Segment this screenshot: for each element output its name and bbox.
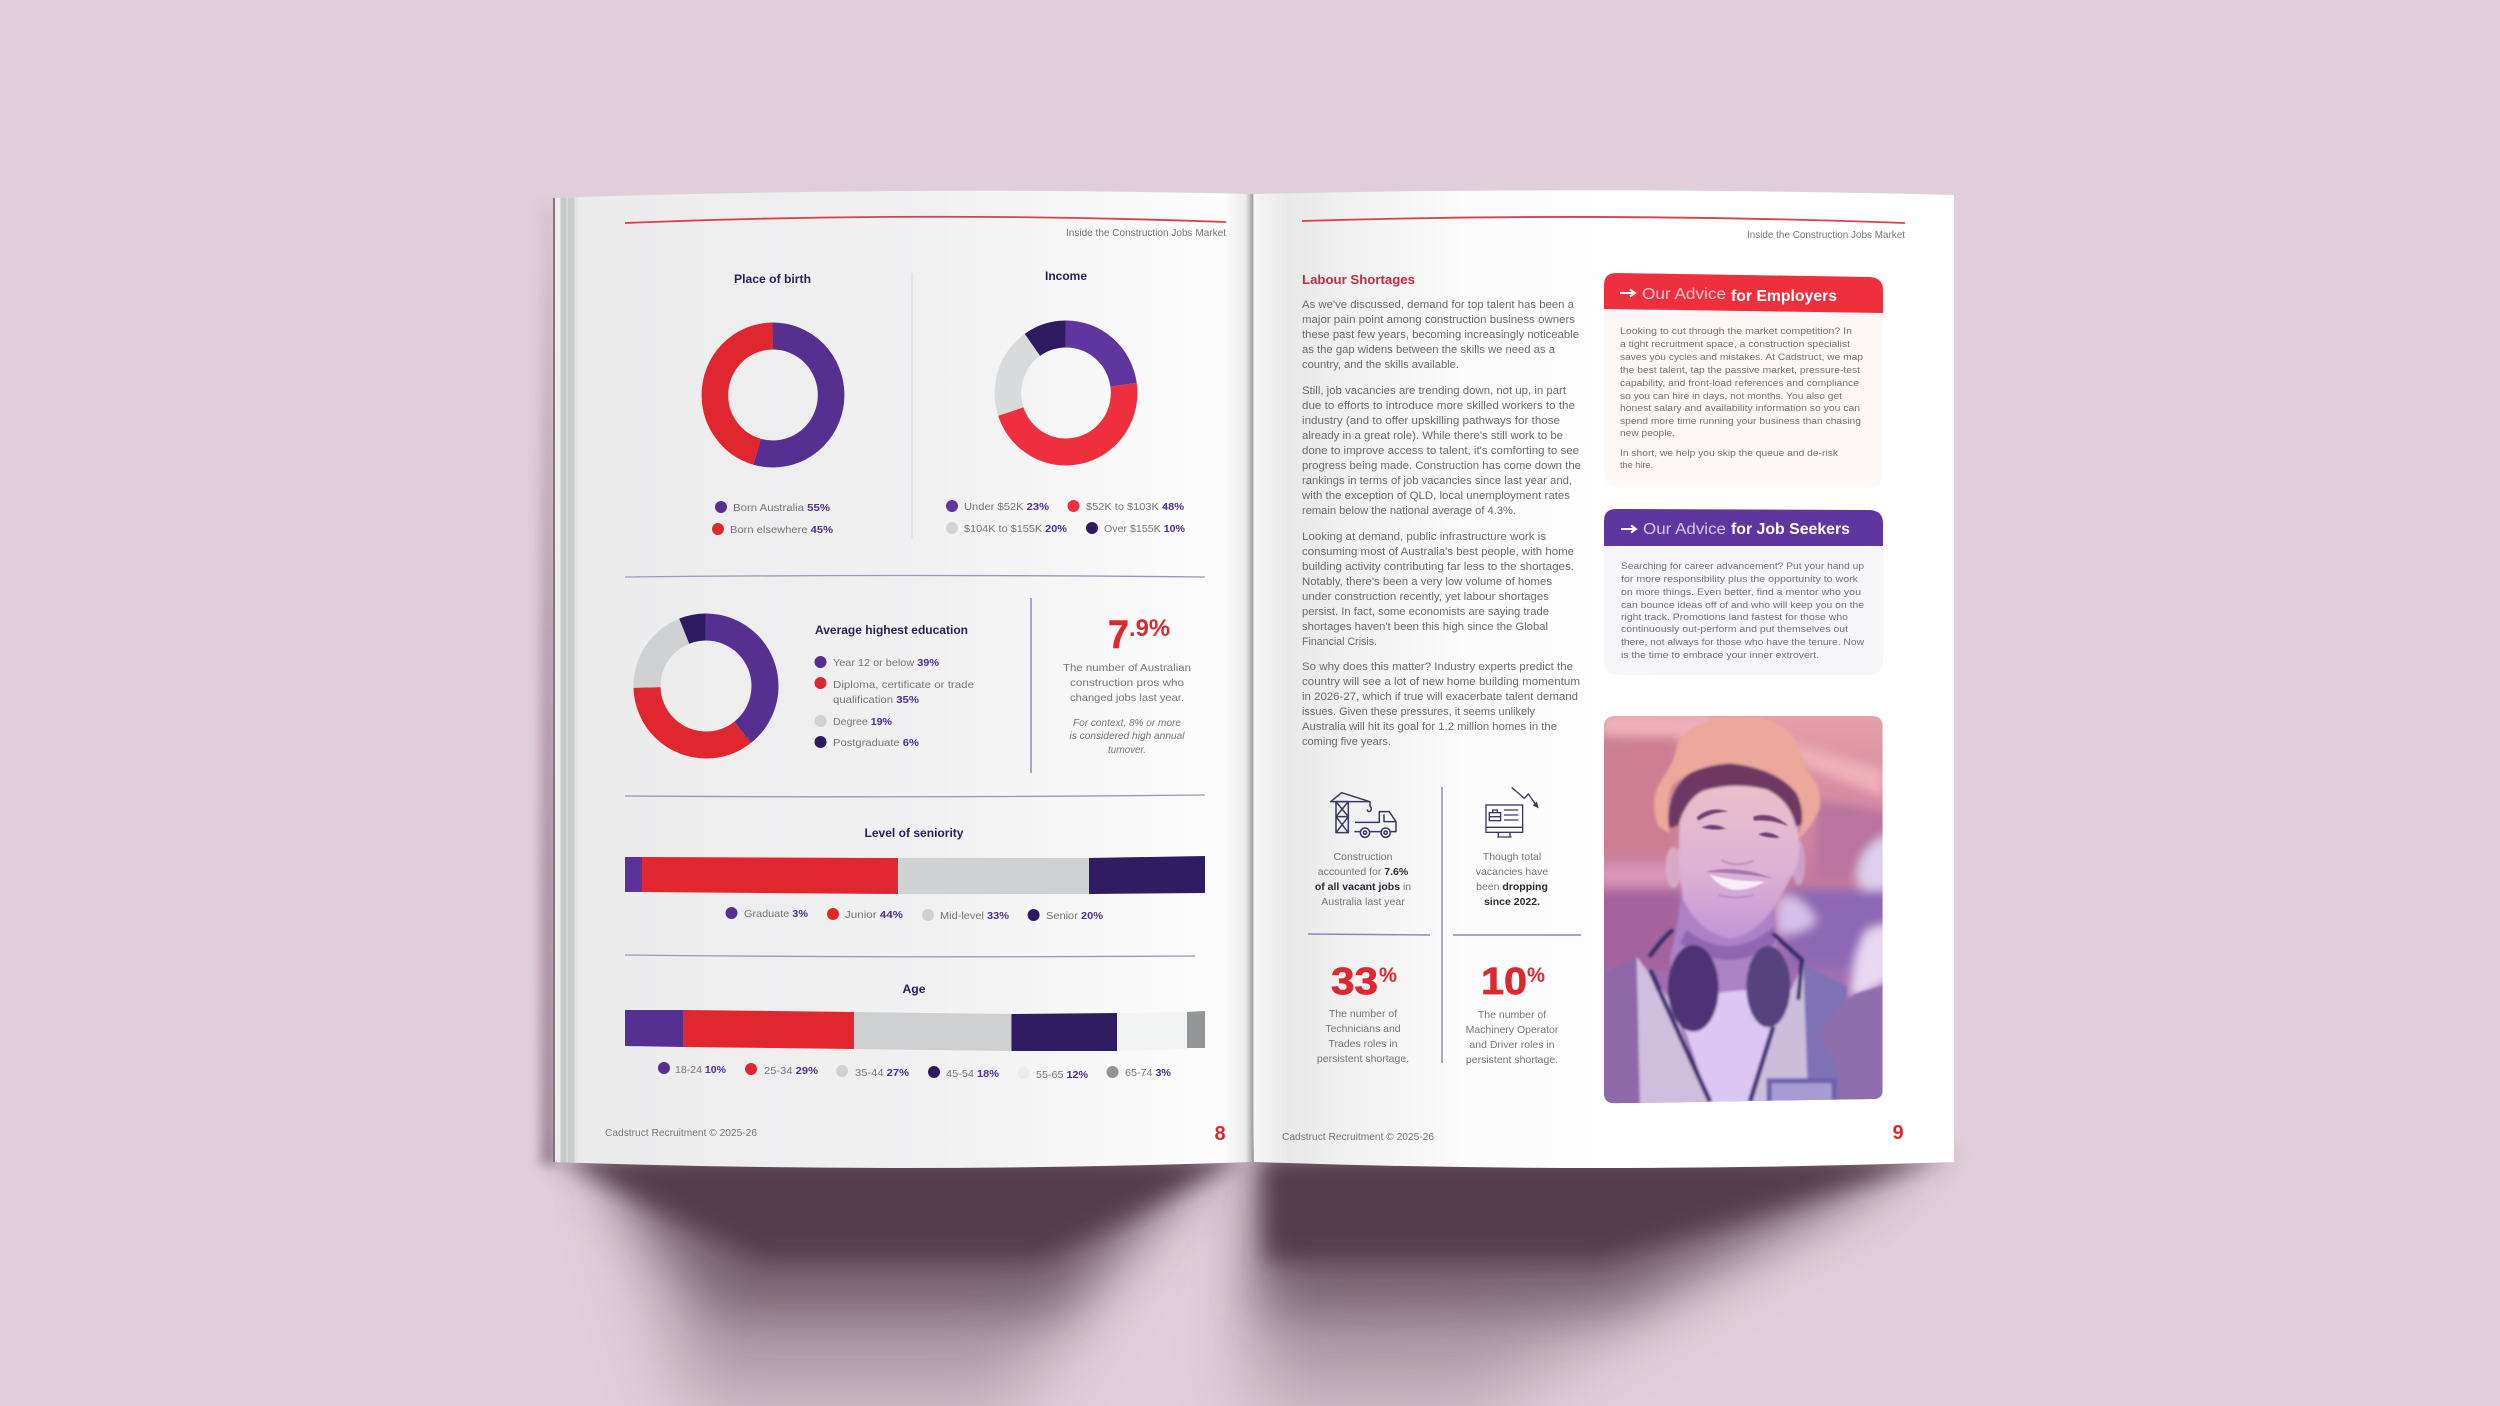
legend: Postgraduate 6% [833, 737, 920, 749]
paragraph 1: as the gap widens between the skills we need as a [1302, 344, 1556, 356]
heading: Level of seniority [864, 826, 964, 840]
panel: advice for job seekers [1604, 509, 1883, 675]
legend: Mid-level 33% [940, 910, 1010, 922]
paragraph 2: done to improve access to talent, it's comforting to see [1302, 445, 1579, 457]
body text [1620, 326, 1863, 471]
paragraph 2: already in a great role). While there's still work to be [1302, 430, 1563, 442]
legend [946, 500, 1186, 535]
heading: Average highest education [815, 623, 968, 637]
body text: for more responsibility plus the opportunity to work [1621, 574, 1858, 585]
body text: continuously out-perform and put themselves out [1621, 624, 1848, 635]
header title [1621, 521, 1850, 538]
paragraph 2: due to efforts to introduce more skilled workers to the [1302, 400, 1575, 412]
stat text: vacant jobs: of all vacant jobs in [1315, 881, 1411, 893]
legend: 25-34 29% [764, 1065, 819, 1077]
text block: labour shortages [1301, 272, 1581, 748]
description: construction pros who [1070, 677, 1184, 689]
legend: Year 12 or below 39% [833, 657, 940, 669]
panel: advice for employers [1604, 273, 1883, 487]
paragraph 3: Notably, there's been a very low volume of homes [1302, 576, 1553, 588]
stat text: dropping vacancies [1476, 851, 1548, 908]
body text: a tight recruitment space, a construction specialist [1620, 339, 1850, 350]
description: and Driver roles in [1469, 1039, 1555, 1051]
icon: monitor with falling arrow [1486, 787, 1539, 837]
paragraph 2: with the exception of QLD, local unemployment rates [1301, 490, 1571, 502]
legend: Degree 19% [833, 716, 893, 728]
chart: level of seniority [625, 826, 1205, 922]
footer left: Cadstruct Recruitment © 2025-26 [605, 1127, 757, 1139]
heading: Labour Shortages [1302, 272, 1415, 287]
legend: 65-74 3% [1125, 1067, 1172, 1079]
paragraph 3: under construction recently, yet labour shortages [1302, 591, 1550, 603]
heading: Age [902, 982, 926, 996]
description: Machinery Operator [1466, 1024, 1559, 1036]
body text: Looking to cut through the market competition? In [1620, 326, 1852, 337]
paragraph 2: Still, job vacancies are trending down, not up, in part [1302, 385, 1566, 397]
paragraph 2: rankings in terms of job vacancies since last year and, [1302, 475, 1572, 487]
description: changed jobs last year. [1070, 692, 1184, 704]
stat: % [1379, 964, 1397, 987]
paragraph 3: Financial Crisis. [1302, 636, 1377, 648]
infographic: open brochure mockup [534, 190, 1954, 1406]
stacked bar [625, 856, 1205, 894]
legend: Graduate 3% [744, 908, 809, 920]
body text: In short, we help you skip the queue and de-risk [1620, 448, 1838, 459]
stat: 33 [1331, 961, 1378, 1003]
body text: so you can hire in days, not months. You also get [1620, 391, 1842, 402]
description [1063, 662, 1191, 704]
description [1317, 1008, 1409, 1065]
paragraph 3: persist. In fact, some economists are saying trade [1302, 606, 1549, 618]
note: turnover. [1108, 744, 1146, 756]
stat: % [1527, 964, 1545, 987]
top rule [625, 217, 1226, 223]
page stack spine [553, 190, 578, 1175]
stat text: dropping vacancies: been dropping [1476, 881, 1548, 893]
paragraph 4 [1302, 661, 1580, 748]
stat text: vacant jobs [1315, 851, 1411, 908]
page sheet left [553, 191, 1253, 1168]
card body [1604, 309, 1883, 487]
donut [715, 336, 831, 454]
stat text: dropping vacancies: since 2022. [1484, 896, 1540, 908]
legend: Senior 20% [1046, 910, 1104, 922]
chart: age [625, 982, 1205, 1081]
legend: Over $155K 10% [1104, 523, 1186, 535]
legend: qualification 35% [833, 694, 920, 706]
stat text: vacant jobs: accounted for 7.6% [1318, 866, 1409, 878]
description [1466, 1009, 1559, 1066]
header title: for Job Seekers [1731, 521, 1850, 538]
legend: Under $52K 23% [964, 501, 1050, 513]
note: For context, 8% or more [1073, 717, 1181, 729]
heading: Place of birth [734, 272, 811, 286]
body text [1621, 561, 1864, 661]
paragraph 1: country, and the skills available. [1302, 359, 1459, 371]
paragraph 3: shortages haven't been this high since the Global [1302, 621, 1548, 633]
note: is considered high annual [1070, 730, 1185, 742]
chart: income [946, 269, 1186, 535]
stat text: dropping vacancies: Though total [1483, 851, 1541, 863]
body text: saves you cycles and mistakes. At Cadstruct, we map [1620, 352, 1863, 363]
legend: Junior 44% [845, 909, 904, 921]
page number 8: 8 [1214, 1123, 1226, 1145]
legend: $52K to $103K 48% [1086, 501, 1185, 513]
stat [1331, 961, 1397, 1003]
card body [1604, 546, 1883, 675]
panel: left page [553, 190, 1253, 1175]
legend [712, 501, 834, 536]
callout: 33% [1317, 961, 1409, 1065]
stacked bar [625, 1010, 1205, 1051]
stat: 7 [1108, 613, 1129, 657]
paragraph 2: industry (and to offer upskilling pathways for those [1302, 415, 1560, 427]
stat text: vacant jobs: Australia last year [1321, 896, 1405, 908]
paragraph 2 [1301, 385, 1581, 517]
stat text: vacant jobs: Construction [1334, 851, 1393, 863]
body text: the best talent, tap the passive market, pressure-test [1620, 365, 1860, 376]
body text: the hire. [1620, 460, 1653, 471]
running header: Inside the Construction Jobs Market [1066, 227, 1226, 239]
photo: construction worker with hard hat [1604, 716, 1883, 1104]
description: The number of Australian [1063, 662, 1191, 674]
paragraph 3: consuming most of Australia's best people, with home [1302, 546, 1574, 558]
description: The number of [1478, 1009, 1546, 1021]
legend: Born elsewhere 45% [730, 524, 834, 536]
paragraph 4: issues. Given these pressures, it seems unlikely [1302, 706, 1535, 718]
description: persistent shortage. [1466, 1054, 1558, 1066]
description: Technicians and [1325, 1023, 1401, 1035]
description: Trades roles in [1328, 1038, 1398, 1050]
legend [814, 656, 974, 749]
header title [1620, 286, 1837, 305]
paragraph 3: building activity contributing far less to the shortages. [1302, 561, 1574, 573]
legend [658, 1062, 1172, 1081]
paragraph 3: Looking at demand, public infrastructure work is [1302, 531, 1547, 543]
footer right: Cadstruct Recruitment © 2025-26 [1282, 1131, 1434, 1143]
legend: Diploma, certificate or trade [833, 679, 974, 691]
body text: honest salary and availability information so you can [1620, 403, 1860, 414]
paragraph 2: remain below the national average of 4.3%. [1302, 505, 1516, 517]
body text: capability, and front-load references and compliance [1620, 378, 1859, 389]
legend: 45-54 18% [946, 1068, 1000, 1080]
callout: 7.9% [1063, 613, 1191, 756]
paragraph 4: So why does this matter? Industry experts predict the [1302, 661, 1573, 673]
description: The number of [1329, 1008, 1397, 1020]
running header: Inside the Construction Jobs Market [1747, 229, 1905, 241]
header title: Our Advice [1643, 521, 1726, 538]
stat [1481, 961, 1545, 1003]
body text: there, not always for those who have the tenure. Now [1621, 637, 1864, 648]
legend: 35-44 27% [855, 1067, 910, 1079]
panel: right page [1254, 190, 1954, 1168]
stat: .9% [1129, 615, 1170, 642]
legend [726, 907, 1104, 922]
legend: Born Australia 55% [733, 502, 831, 514]
page sheet right [1254, 190, 1954, 1168]
paragraph 2: progress being made. Construction has come down the [1302, 460, 1581, 472]
header title: for Employers [1731, 288, 1837, 305]
icon: crane and truck [1331, 793, 1396, 837]
stat text: dropping vacancies: vacancies have [1476, 866, 1548, 878]
body text: Searching for career advancement? Put your hand up [1621, 561, 1864, 572]
paragraph 4: coming five years. [1302, 736, 1391, 748]
paragraph 1: major pain point among construction business owners [1302, 314, 1576, 326]
facial features [1697, 809, 1788, 897]
book shadow [541, 205, 1952, 1406]
stat [1108, 613, 1170, 657]
body text: right track. Promotions land fastest for those who [1621, 612, 1848, 623]
chart: average highest education [647, 623, 974, 749]
paragraph 4: in 2026-27, which if true will exacerbate talent demand [1302, 691, 1578, 703]
donut [647, 627, 765, 745]
paragraph 4: Australia will hit its goal for 1.2 million homes in the [1302, 721, 1557, 733]
paragraph 3 [1302, 531, 1574, 648]
body text: spend more time running your business than chasing [1620, 416, 1861, 427]
heading: Income [1045, 269, 1087, 283]
card header [1604, 273, 1883, 313]
body text: can bounce ideas off of and who will keep you on the [1621, 600, 1864, 611]
legend: 55-65 12% [1036, 1069, 1089, 1081]
chart: place of birth [712, 272, 834, 536]
description: persistent shortage. [1317, 1053, 1409, 1065]
donut [1008, 334, 1124, 452]
header title: Our Advice [1642, 286, 1726, 303]
paragraph 4: country will see a lot of new home building momentum [1302, 676, 1580, 688]
body text: is the time to embrace your inner extrovert. [1621, 650, 1819, 661]
paragraph 1: As we've discussed, demand for top talent has been a [1302, 299, 1575, 311]
callout: 10% [1466, 961, 1559, 1066]
stat: 10 [1481, 961, 1527, 1003]
top rule [1302, 217, 1905, 223]
body text: new people. [1620, 428, 1675, 439]
note [1070, 717, 1185, 756]
body text: on more things. Even better, find a mentor who you [1621, 587, 1861, 598]
card header [1604, 509, 1883, 546]
legend: $104K to $155K 20% [964, 523, 1068, 535]
legend: 18-24 10% [675, 1064, 727, 1076]
paragraph 1 [1302, 299, 1579, 371]
page number 9: 9 [1892, 1122, 1904, 1144]
paragraph 1: these past few years, becoming increasingly noticeable [1302, 329, 1579, 341]
